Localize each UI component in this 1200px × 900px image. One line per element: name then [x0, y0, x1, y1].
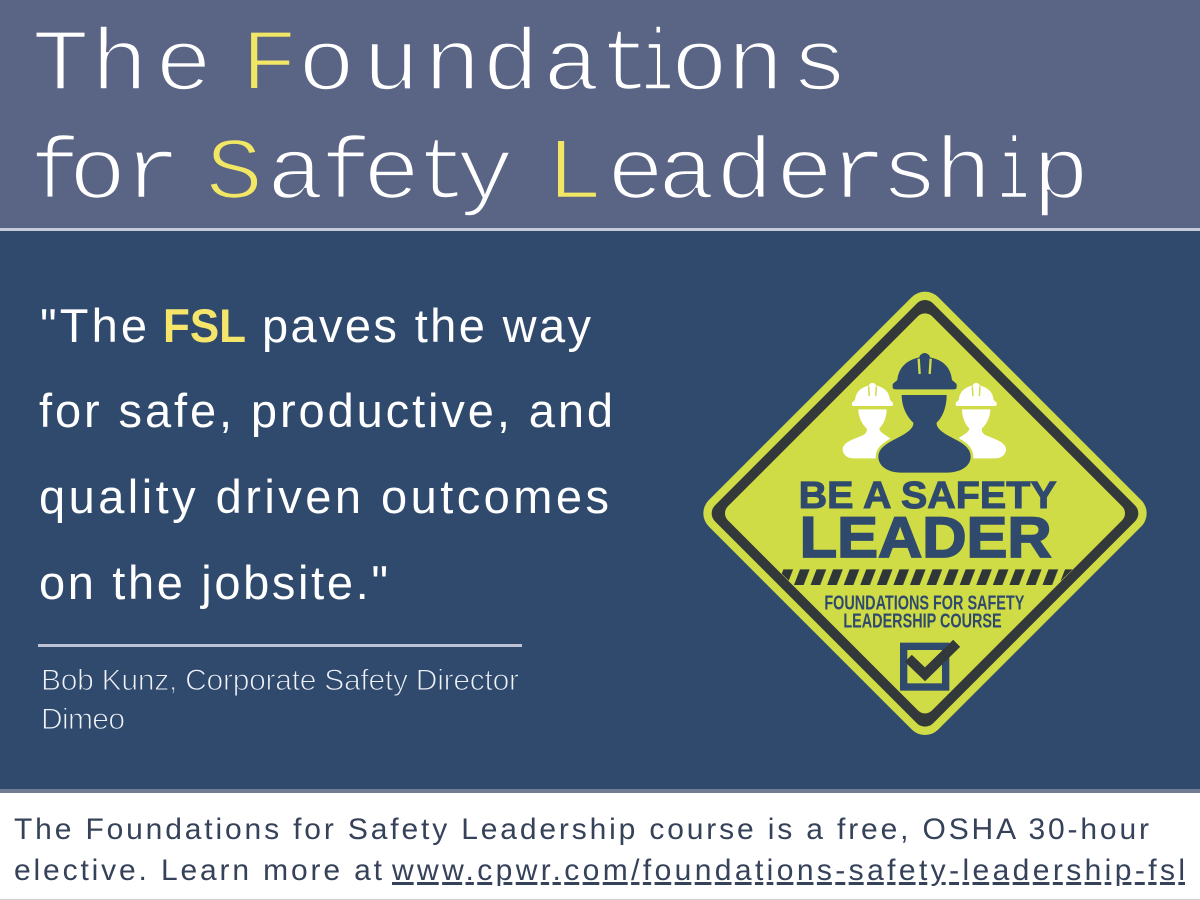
footer bottom border	[0, 899, 1200, 900]
icon: navy leader worker	[878, 353, 971, 473]
quote: on the jobsite."	[39, 556, 388, 609]
quote: for safe, productive, and	[39, 384, 613, 437]
quote: paves the way	[262, 299, 592, 352]
badge diamond	[722, 310, 1128, 716]
panel: title banner	[0, 0, 1200, 229]
badge: be a safety leader	[722, 310, 1128, 716]
footer text	[14, 813, 1185, 887]
title: or	[69, 125, 181, 225]
title: a	[266, 125, 325, 225]
badge heading: BE A SAFETY	[799, 474, 1057, 516]
quote	[39, 299, 613, 609]
title: S	[205, 125, 263, 225]
attribution divider	[38, 644, 522, 647]
hazard stripe	[777, 569, 1073, 585]
attribution	[41, 664, 519, 736]
title: t	[417, 125, 467, 225]
quote: FSL	[163, 299, 246, 352]
footer top border	[0, 789, 1200, 793]
panel: footer	[0, 789, 1200, 900]
badge subheading: LEADERSHIP COURSE	[843, 611, 1002, 633]
icon: white worker left	[843, 383, 897, 458]
title: f	[321, 125, 371, 225]
footer text: The Foundations for Safety Leadership course is a free, OSHA 30-hour	[14, 813, 1149, 846]
badge subheading: FOUNDATIONS FOR SAFETY	[824, 592, 1024, 614]
title: F	[240, 16, 299, 116]
quote: quality driven outcomes	[39, 470, 609, 523]
title: L	[545, 125, 603, 225]
title	[30, 16, 1090, 225]
title: e	[362, 125, 421, 225]
banner divider	[0, 228, 1200, 231]
attribution: Dimeo	[41, 703, 125, 736]
attribution: Bob Kunz, Corporate Safety Director	[41, 664, 519, 697]
title: eadersh	[607, 125, 993, 225]
footer text: www.cpwr.com/foundations-safety-leadership-fsl	[391, 854, 1185, 887]
badge heading: LEADER	[800, 506, 1052, 570]
title: ounda	[298, 16, 601, 116]
title: y	[456, 125, 514, 225]
icon: white worker right	[952, 383, 1006, 458]
title: The	[32, 16, 213, 116]
title: t	[600, 17, 650, 116]
title: i	[998, 125, 1029, 225]
title: ons	[670, 16, 848, 116]
icon: checkbox	[904, 643, 957, 687]
footer text: elective. Learn more at	[14, 854, 383, 887]
title: i	[642, 17, 673, 116]
quote: "The	[40, 299, 147, 352]
badge heading	[799, 474, 1057, 570]
badge subheading	[824, 592, 1024, 633]
title: f	[30, 125, 80, 225]
title: p	[1032, 125, 1090, 225]
panel: main background	[0, 229, 1200, 791]
